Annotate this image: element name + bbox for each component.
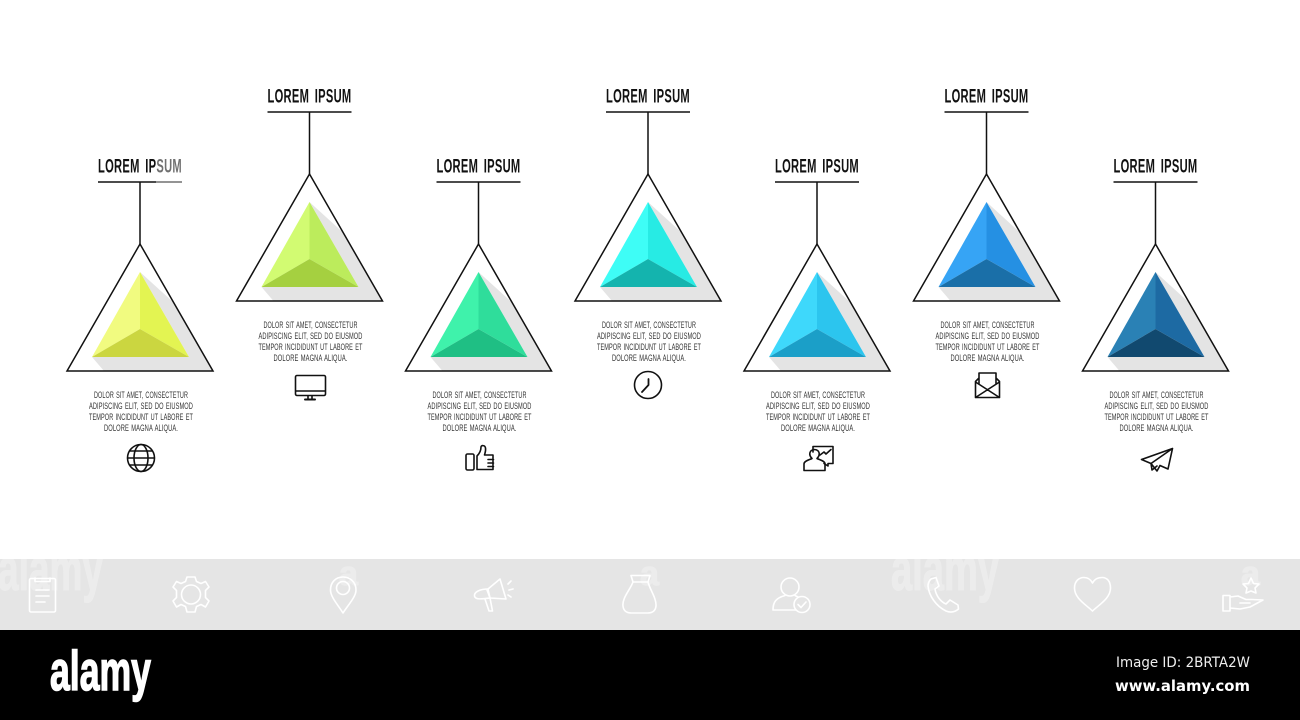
body text: DOLORE MAGNA ALIQUA. (950, 353, 1024, 363)
outline triangle (67, 244, 213, 371)
image id: Image ID: 2BRTA2W (1116, 655, 1250, 671)
heading: LOREM IPSUM (1114, 156, 1198, 178)
body text (597, 320, 701, 363)
connector (436, 182, 520, 244)
connector (268, 112, 352, 174)
icon: open envelope (976, 373, 1000, 398)
body text: TEMPOR INCIDIDUNT UT LABORE ET (1104, 412, 1209, 422)
body text: DOLOR SIT AMET, CONSECTETUR (771, 390, 865, 400)
icon: globe (128, 444, 154, 472)
body text: ADIPISCING ELIT, SED DO EIUSMOD (89, 401, 193, 411)
outline triangle (406, 244, 552, 371)
body text: ADIPISCING ELIT, SED DO EIUSMOD (258, 331, 363, 341)
outline triangle (914, 174, 1060, 301)
body text: DOLORE MAGNA ALIQUA. (781, 423, 855, 433)
pyramid (430, 272, 528, 357)
body text: DOLOR SIT AMET, CONSECTETUR (94, 390, 188, 400)
pyramid (262, 202, 358, 287)
connector (1114, 182, 1198, 244)
icon: person with check (773, 578, 810, 612)
step 6: blue triangle (914, 86, 1060, 363)
heading: LOREM IPSUM (606, 86, 690, 108)
pyramid shadow (938, 202, 1060, 301)
body text: DOLOR SIT AMET, CONSECTETUR (264, 320, 358, 330)
body text: ADIPISCING ELIT, SED DO EIUSMOD (597, 331, 701, 341)
pyramid (600, 202, 697, 287)
icon: paper plane (1142, 448, 1172, 471)
body text (766, 390, 870, 433)
icon: money bag (623, 576, 656, 613)
body text (428, 390, 532, 433)
body text: DOLORE MAGNA ALIQUA. (104, 423, 178, 433)
body text: TEMPOR INCIDIDUNT UT LABORE ET (89, 412, 193, 422)
watermarks: a (640, 555, 660, 593)
connector (98, 182, 182, 244)
connector (775, 182, 859, 244)
body text: DOLORE MAGNA ALIQUA. (1120, 423, 1194, 433)
icon: clock (634, 372, 662, 398)
outline triangle (236, 174, 382, 301)
body text: ADIPISCING ELIT, SED DO EIUSMOD (1104, 401, 1209, 411)
icon: megaphone (474, 579, 513, 611)
body text: DOLORE MAGNA ALIQUA. (442, 423, 516, 433)
step 3: green triangle (406, 156, 552, 433)
step 7: navy triangle (1082, 156, 1228, 433)
body text: DOLOR SIT AMET, CONSECTETUR (940, 320, 1035, 330)
body text (1104, 390, 1209, 433)
pyramid shadow (430, 272, 552, 371)
icon: monitor (296, 376, 326, 400)
outline triangle (744, 244, 890, 371)
pyramid (92, 272, 189, 357)
body text: ADIPISCING ELIT, SED DO EIUSMOD (428, 401, 532, 411)
body text: DOLORE MAGNA ALIQUA. (274, 353, 348, 363)
icon: thumbs up (466, 446, 494, 470)
body text: DOLOR SIT AMET, CONSECTETUR (1110, 390, 1204, 400)
body text: ADIPISCING ELIT, SED DO EIUSMOD (936, 331, 1040, 341)
pyramid (938, 202, 1036, 287)
body text: ADIPISCING ELIT, SED DO EIUSMOD (766, 401, 870, 411)
body text: TEMPOR INCIDIDUNT UT LABORE ET (428, 412, 532, 422)
body text: DOLOR SIT AMET, CONSECTETUR (602, 320, 696, 330)
step 4: cyan triangle (575, 86, 721, 363)
pyramid shadow (600, 202, 721, 301)
icon: presenter with chart (804, 446, 833, 470)
connector (606, 112, 690, 174)
outline triangle (575, 174, 721, 301)
body text (936, 320, 1040, 363)
website: www.alamy.com (1115, 677, 1250, 695)
connector (944, 112, 1028, 174)
step 2: lime triangle (236, 86, 382, 363)
heading: LOREM IPSUM (98, 156, 182, 178)
pyramid (1108, 272, 1204, 357)
body text: TEMPOR INCIDIDUNT UT LABORE ET (766, 412, 870, 422)
watermarks: alamy (891, 536, 999, 603)
pyramid shadow (262, 202, 382, 301)
body text: TEMPOR INCIDIDUNT UT LABORE ET (258, 342, 363, 352)
icon: heart (1074, 578, 1110, 611)
black footer (0, 630, 1300, 720)
heading: LOREM IPSUM (268, 86, 352, 108)
body text (89, 390, 193, 433)
body text: TEMPOR INCIDIDUNT UT LABORE ET (597, 342, 701, 352)
grey icon band (0, 559, 1300, 630)
watermark: heading fade (156, 155, 184, 185)
heading: LOREM IPSUM (944, 86, 1028, 108)
body text: DOLOR SIT AMET, CONSECTETUR (432, 390, 527, 400)
watermarks: alamy (0, 536, 103, 603)
body text: TEMPOR INCIDIDUNT UT LABORE ET (936, 342, 1040, 352)
heading: LOREM IPSUM (436, 156, 520, 178)
watermarks (0, 536, 1261, 603)
pyramid shadow (1108, 272, 1228, 371)
icon: map pin (330, 577, 356, 613)
heading: LOREM IPSUM (775, 156, 859, 178)
pyramid (769, 272, 866, 357)
icon: phone (928, 578, 958, 612)
step 5: sky blue triangle (744, 156, 890, 433)
step 1: yellow triangle (67, 156, 213, 433)
alamy logo: alamy (50, 639, 151, 702)
body text: DOLORE MAGNA ALIQUA. (612, 353, 686, 363)
icon: clipboard (30, 578, 56, 612)
watermarks: a (339, 555, 359, 593)
icon: hand with star (1223, 578, 1263, 611)
icon: gear (173, 577, 209, 612)
pyramid shadow (92, 272, 213, 371)
pyramid shadow (769, 272, 890, 371)
watermarks: a (1241, 555, 1261, 593)
body text (258, 320, 363, 363)
outline triangle (1082, 244, 1228, 371)
